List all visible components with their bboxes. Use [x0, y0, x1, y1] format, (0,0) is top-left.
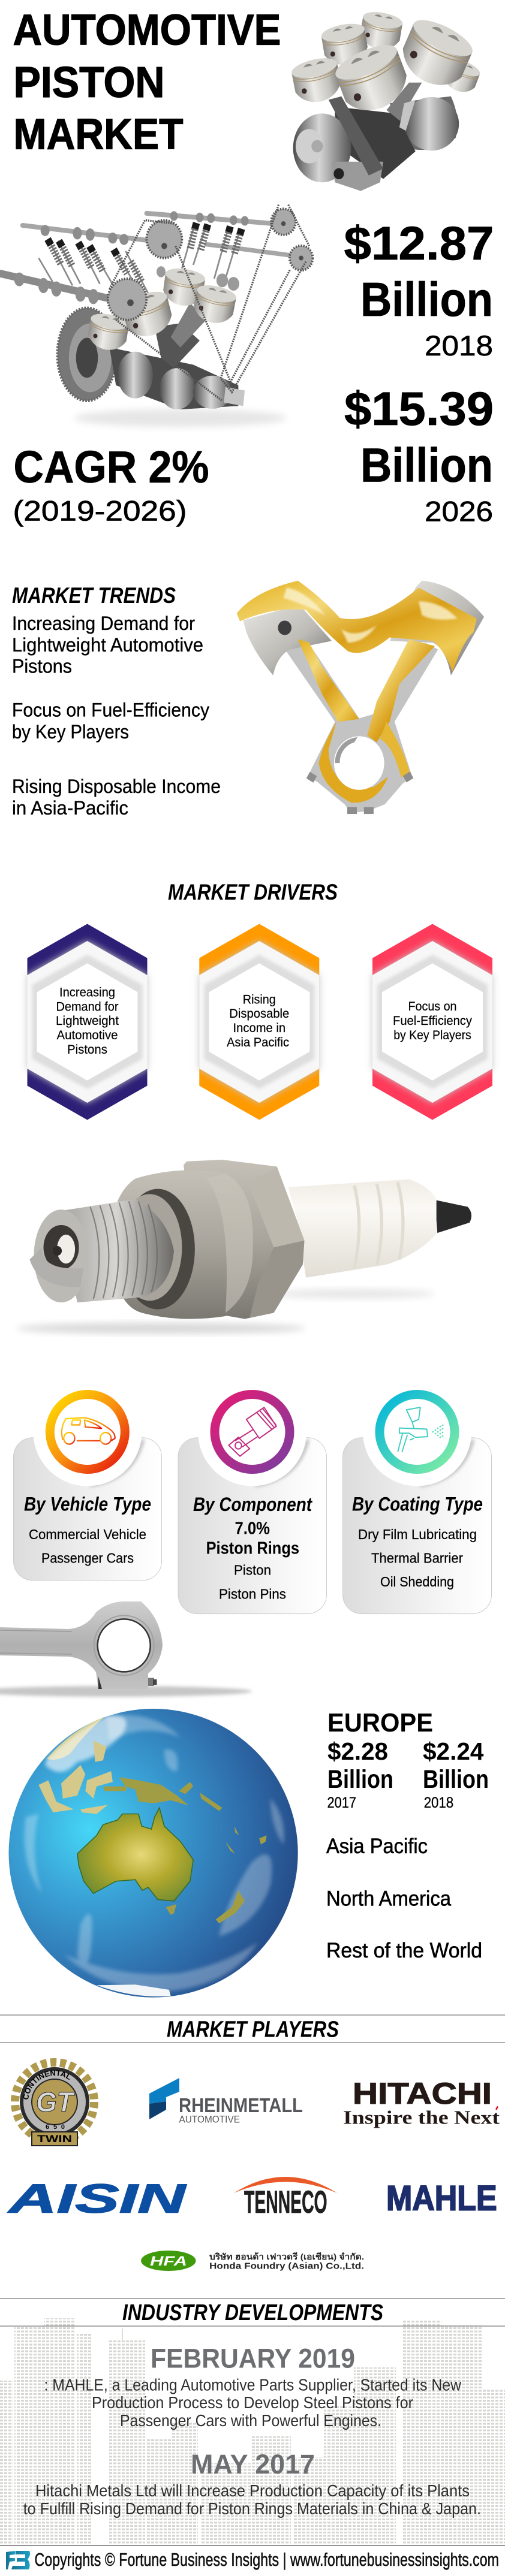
text: trends list: by Key Players: [12, 721, 129, 743]
stat: 2026 market value: 2026: [425, 496, 493, 527]
heading: by component: By Component: [193, 1494, 312, 1515]
text: trends list: Pistons: [12, 656, 72, 677]
image: spark plug: [16, 1160, 471, 1334]
text: other components: [219, 1563, 286, 1601]
text: vehicle types: Commercial Vehicle: [29, 1527, 146, 1542]
image: oil-covered twin pistons: [237, 581, 484, 814]
panel: Europe regional value: [327, 1708, 489, 1811]
text: driver 3: Focus on: [408, 999, 457, 1013]
logo: Hitachi: [343, 2077, 500, 2128]
text: May 2017 development: Hitachi Metals Ltd will Increase Production Capacity of its Plants: [35, 2481, 470, 2500]
logo: Rheinmetall Automotive: [149, 2078, 303, 2125]
logo: Hitachi: HITACHI: [353, 2077, 492, 2110]
background: city skyline: [0, 2318, 505, 2545]
text: coating types: Dry Film Lubricating: [358, 1527, 477, 1542]
icon: car: [50, 1394, 125, 1470]
stat: Europe 2017: $2.28: [327, 1738, 388, 1765]
text: trends list: in Asia-Pacific: [12, 797, 128, 819]
timing chain: [110, 205, 309, 401]
stat: 2018 market value: [344, 216, 494, 361]
heading: industry developments: INDUSTRY DEVELOPMENTS: [122, 2300, 383, 2325]
stat: Europe 2017: 2017: [327, 1794, 356, 1811]
panel: by coating type: [343, 1377, 492, 1614]
logo: Honda Foundry: [141, 2251, 364, 2271]
stat: 2018 market value: Billion: [360, 273, 493, 326]
heading: by coating type: By Coating Type: [352, 1493, 483, 1515]
text: driver 3: [393, 999, 472, 1042]
text: February 2019 development: Production Process to Develop Steel Pistons for: [92, 2393, 413, 2412]
logo: Continental GT: TWIN: [37, 2133, 72, 2144]
text: other regions: North America: [326, 1887, 451, 1911]
text: trends list: [12, 613, 221, 819]
icon: Fortune Business Insights logo: [6, 2551, 30, 2569]
text: other regions: Rest of the World: [326, 1939, 482, 1962]
logo: Hitachi: Inspire the Next: [343, 2106, 500, 2128]
text: May 2017 development: [23, 2449, 481, 2518]
title: [13, 7, 281, 158]
stat: Europe 2018: Billion: [423, 1765, 489, 1794]
logo: Continental GT: CONTINENTAL: [23, 2070, 70, 2100]
text: leading component share: 7.0%: [235, 1519, 270, 1538]
icon: spray gun: [380, 1394, 455, 1470]
panel: market trends: [12, 583, 221, 819]
text: other regions: [326, 1835, 482, 1962]
text: other components: Piston Pins: [219, 1586, 286, 1601]
text: driver 3: by Key Players: [393, 1028, 471, 1042]
panel: by vehicle type: [13, 1377, 162, 1580]
text: February 2019 development: : MAHLE, a Leading Automotive Parts Supplier, Started its New: [44, 2376, 462, 2394]
text: driver 2: [227, 992, 289, 1049]
logo: Rheinmetall Automotive: AUTOMOTIVE: [179, 2114, 240, 2125]
text: driver 1: Lightweight: [56, 1013, 119, 1028]
panel: driver hexagon, lightweight pistons: [28, 924, 148, 1120]
stat: CAGR: (2019-2026): [13, 495, 187, 526]
panel: driver hexagon, disposable income: [199, 924, 319, 1120]
flywheel: [58, 308, 116, 401]
text: coating types: Oil Shedding: [380, 1574, 454, 1589]
valve springs: [52, 229, 240, 282]
image: globe: [8, 1709, 298, 1998]
text: leading component share: [206, 1519, 299, 1558]
text: coating types: Thermal Barrier: [371, 1551, 463, 1566]
heading: market drivers: MARKET DRIVERS: [168, 880, 338, 904]
stat: 2026 market value: [344, 382, 494, 527]
text: other components: Piston: [234, 1563, 271, 1578]
text: trends list: Rising Disposable Income: [12, 776, 221, 797]
text: region heading: EUROPE: [327, 1708, 433, 1738]
text: driver 2: Disposable: [229, 1006, 289, 1021]
text: vehicle types: Passenger Cars: [41, 1551, 134, 1566]
stat: 2026 market value: $15.39: [344, 382, 494, 435]
image: engine valve train: [0, 205, 312, 427]
sprockets: [108, 209, 312, 320]
text: driver 1: [56, 985, 119, 1057]
text: coating types: [358, 1527, 477, 1589]
stat: 2018 market value: 2018: [425, 330, 493, 361]
logo: Aisin: AISIN: [7, 2176, 187, 2222]
stat: Europe 2018: [423, 1738, 489, 1811]
logo: Rheinmetall Automotive: RHEINMETALL: [179, 2094, 303, 2116]
stat: Europe 2018: $2.24: [423, 1738, 484, 1765]
heading: market players: MARKET PLAYERS: [167, 2017, 339, 2042]
text: driver 1: Pistons: [67, 1042, 107, 1057]
title: MARKET: [13, 110, 184, 158]
logo: Continental GT: GT: [36, 2086, 76, 2117]
icon: piston: [215, 1394, 290, 1470]
stat: CAGR: CAGR 2%: [13, 442, 209, 492]
cam shafts: [0, 213, 298, 299]
logo: Continental GT: 650: [46, 2123, 65, 2131]
text: vehicle types: [29, 1527, 146, 1566]
image: pistons and crankshaft: [290, 9, 482, 191]
text: trends list: Focus on Fuel-Efficiency: [12, 699, 209, 721]
text: driver 1: Increasing: [59, 985, 115, 999]
stat: Europe 2018: 2018: [424, 1794, 453, 1811]
stat: Europe 2017: [327, 1738, 393, 1811]
text: February 2019 development: [44, 2343, 462, 2430]
logo: Continental GT: [11, 2058, 98, 2146]
logo: Tenneco: TENNECO: [244, 2185, 327, 2220]
logo: Honda Foundry: Honda Foundry (Asian) Co.,Ltd.: [209, 2261, 364, 2271]
panel: by component: [178, 1377, 326, 1614]
crankshaft: [110, 348, 238, 409]
image: connecting rod: [0, 1601, 252, 1697]
logo: Tenneco: [234, 2177, 337, 2220]
text: trends list: Increasing Demand for: [12, 613, 195, 634]
logo: Honda Foundry: HFA: [150, 2254, 187, 2269]
text: trends list: Lightweight Automotive: [12, 634, 203, 656]
text: driver 2: Income in: [233, 1021, 285, 1035]
stat: 2018 market value: $12.87: [344, 216, 494, 270]
title: AUTOMOTIVE: [13, 7, 281, 55]
stat: 2026 market value: Billion: [360, 439, 493, 492]
text: driver 3: Fuel-Efficiency: [393, 1013, 472, 1028]
stat: CAGR: [13, 442, 209, 526]
text: leading component share: Piston Rings: [206, 1539, 299, 1558]
text: driver 1: Demand for: [56, 999, 119, 1013]
text: driver 2: Rising: [243, 992, 276, 1006]
text: other regions: Asia Pacific: [326, 1835, 428, 1858]
logo: Honda Foundry: บริษัท ฮอนด้า เฟาวดรี (เอเชียน) จำกัด.: [209, 2252, 364, 2261]
text: May 2017 development: MAY 2017: [191, 2449, 315, 2480]
valve stems: [38, 224, 240, 299]
text: driver 1: Automotive: [56, 1028, 118, 1042]
title: PISTON: [13, 59, 164, 107]
text: February 2019 development: FEBRUARY 2019: [151, 2343, 355, 2373]
panel: driver hexagon, fuel efficiency: [372, 924, 492, 1120]
stat: Europe 2017: Billion: [327, 1765, 393, 1794]
heading: market trends: MARKET TRENDS: [12, 583, 176, 608]
text: driver 2: Asia Pacific: [227, 1035, 289, 1049]
text: February 2019 development: Passenger Cars with Powerful Engines.: [120, 2411, 381, 2430]
heading: by vehicle type: By Vehicle Type: [24, 1493, 151, 1515]
